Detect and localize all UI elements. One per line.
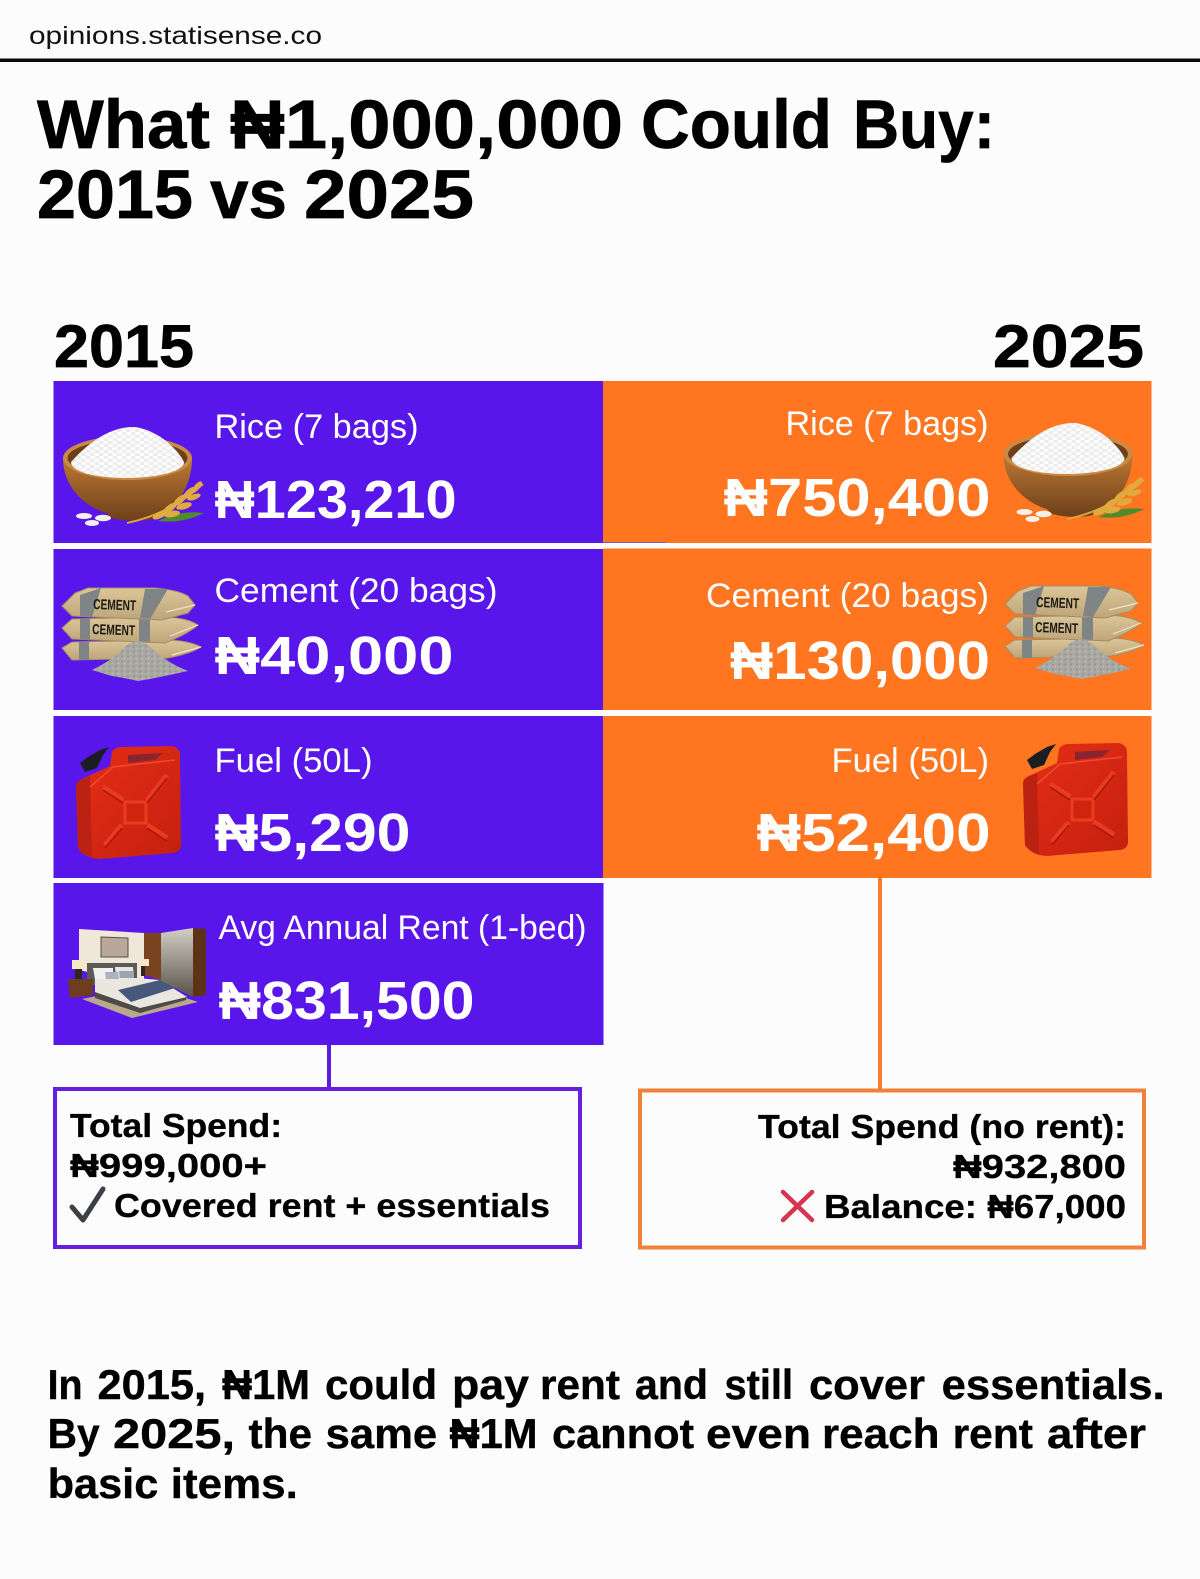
panel: 2015 rent bbox=[54, 883, 604, 1045]
takeaway text bbox=[48, 1361, 1165, 1507]
icon: cross mark bbox=[783, 1192, 812, 1220]
label: cement 2025: Cement (20 bags) bbox=[706, 577, 989, 615]
takeaway text: even bbox=[706, 1410, 811, 1457]
text: total 2025: Total Spend (no rent): bbox=[758, 1108, 1126, 1145]
takeaway text: still bbox=[724, 1361, 793, 1408]
icon: rice bowl bbox=[1004, 423, 1144, 522]
title: What bbox=[37, 86, 210, 163]
takeaway text: items. bbox=[171, 1460, 298, 1507]
value: rice 2015: ₦123,210 bbox=[214, 470, 456, 530]
callout: 2015 total spend bbox=[55, 1089, 580, 1247]
takeaway text: ₦1M bbox=[450, 1410, 538, 1457]
icon: check mark bbox=[72, 1189, 103, 1220]
title: Could bbox=[641, 86, 832, 163]
value: fuel 2025: ₦52,400 bbox=[756, 803, 990, 863]
takeaway text: cover bbox=[809, 1361, 925, 1408]
title: Buy: bbox=[853, 86, 995, 163]
takeaway text: reach bbox=[822, 1410, 940, 1457]
label: rent 2015: Avg Annual Rent (1-bed) bbox=[218, 909, 586, 947]
takeaway text: 2025, bbox=[113, 1410, 235, 1457]
takeaway text: essentials. bbox=[942, 1361, 1165, 1408]
takeaway text: ₦1M bbox=[222, 1361, 310, 1408]
panel: 2025 rice bbox=[603, 381, 1152, 543]
takeaway text: cannot bbox=[552, 1410, 694, 1457]
text: total 2015: Total Spend: bbox=[70, 1107, 282, 1144]
text: amount 2015: ₦999,000+ bbox=[70, 1147, 267, 1184]
takeaway text: and bbox=[635, 1361, 708, 1408]
value: rice 2025: ₦750,400 bbox=[724, 468, 990, 528]
label: rice 2025: Rice (7 bags) bbox=[786, 405, 988, 443]
takeaway text: after bbox=[1047, 1410, 1146, 1457]
value: cement 2025: ₦130,000 bbox=[730, 631, 990, 691]
value: rent 2015: ₦831,500 bbox=[218, 971, 474, 1031]
takeaway text: pay bbox=[452, 1361, 530, 1408]
icon: cement bags bbox=[62, 588, 201, 681]
value: cement 2015: ₦40,000 bbox=[214, 626, 454, 686]
icon: jerry can bbox=[76, 746, 181, 859]
header: site name bbox=[0, 22, 1200, 62]
title: 2015 bbox=[37, 156, 193, 233]
takeaway text: rent bbox=[953, 1410, 1033, 1457]
icon: bedroom bbox=[68, 928, 206, 1018]
title: vs bbox=[210, 156, 287, 233]
takeaway text: rent bbox=[540, 1361, 620, 1408]
title bbox=[37, 86, 995, 233]
icon: cement bags bbox=[1005, 586, 1144, 679]
value: fuel 2015: ₦5,290 bbox=[214, 803, 410, 863]
takeaway text: By bbox=[48, 1410, 100, 1457]
takeaway text: same bbox=[326, 1410, 437, 1457]
label: rice 2015: Rice (7 bags) bbox=[214, 408, 418, 446]
text: balance: Balance: ₦67,000 bbox=[824, 1188, 1126, 1225]
takeaway text: In bbox=[48, 1361, 83, 1408]
icon: rice bowl bbox=[63, 427, 204, 526]
title: 2025 bbox=[304, 156, 474, 233]
text: covered note: Covered rent + essentials bbox=[114, 1187, 550, 1224]
connector: 2025 column to total bbox=[878, 878, 882, 1090]
header: site name: opinions.statisense.co bbox=[29, 22, 322, 50]
text: amount 2025: ₦932,800 bbox=[953, 1148, 1126, 1185]
title: ₦1,000,000 bbox=[230, 86, 623, 163]
panel: 2015 fuel bbox=[54, 716, 604, 878]
icon: jerry can bbox=[1023, 743, 1128, 856]
connector: 2015 column to total bbox=[327, 1045, 331, 1089]
panel: 2025 fuel bbox=[603, 716, 1152, 878]
takeaway text: 2015, bbox=[98, 1361, 206, 1408]
column heading: 2025: 2025 bbox=[993, 313, 1144, 380]
takeaway text: could bbox=[325, 1361, 437, 1408]
callout: 2025 total spend bbox=[640, 1090, 1144, 1248]
label: fuel 2015: Fuel (50L) bbox=[214, 742, 372, 780]
panel: 2015 cement bbox=[54, 549, 604, 710]
column heading: 2015: 2015 bbox=[54, 313, 194, 380]
label: fuel 2025: Fuel (50L) bbox=[832, 742, 989, 780]
label: cement 2015: Cement (20 bags) bbox=[214, 572, 498, 610]
takeaway text: basic bbox=[48, 1460, 158, 1507]
panel: 2015 rice bbox=[54, 381, 604, 543]
takeaway text: the bbox=[248, 1410, 312, 1457]
panel: 2025 cement bbox=[603, 548, 1152, 710]
